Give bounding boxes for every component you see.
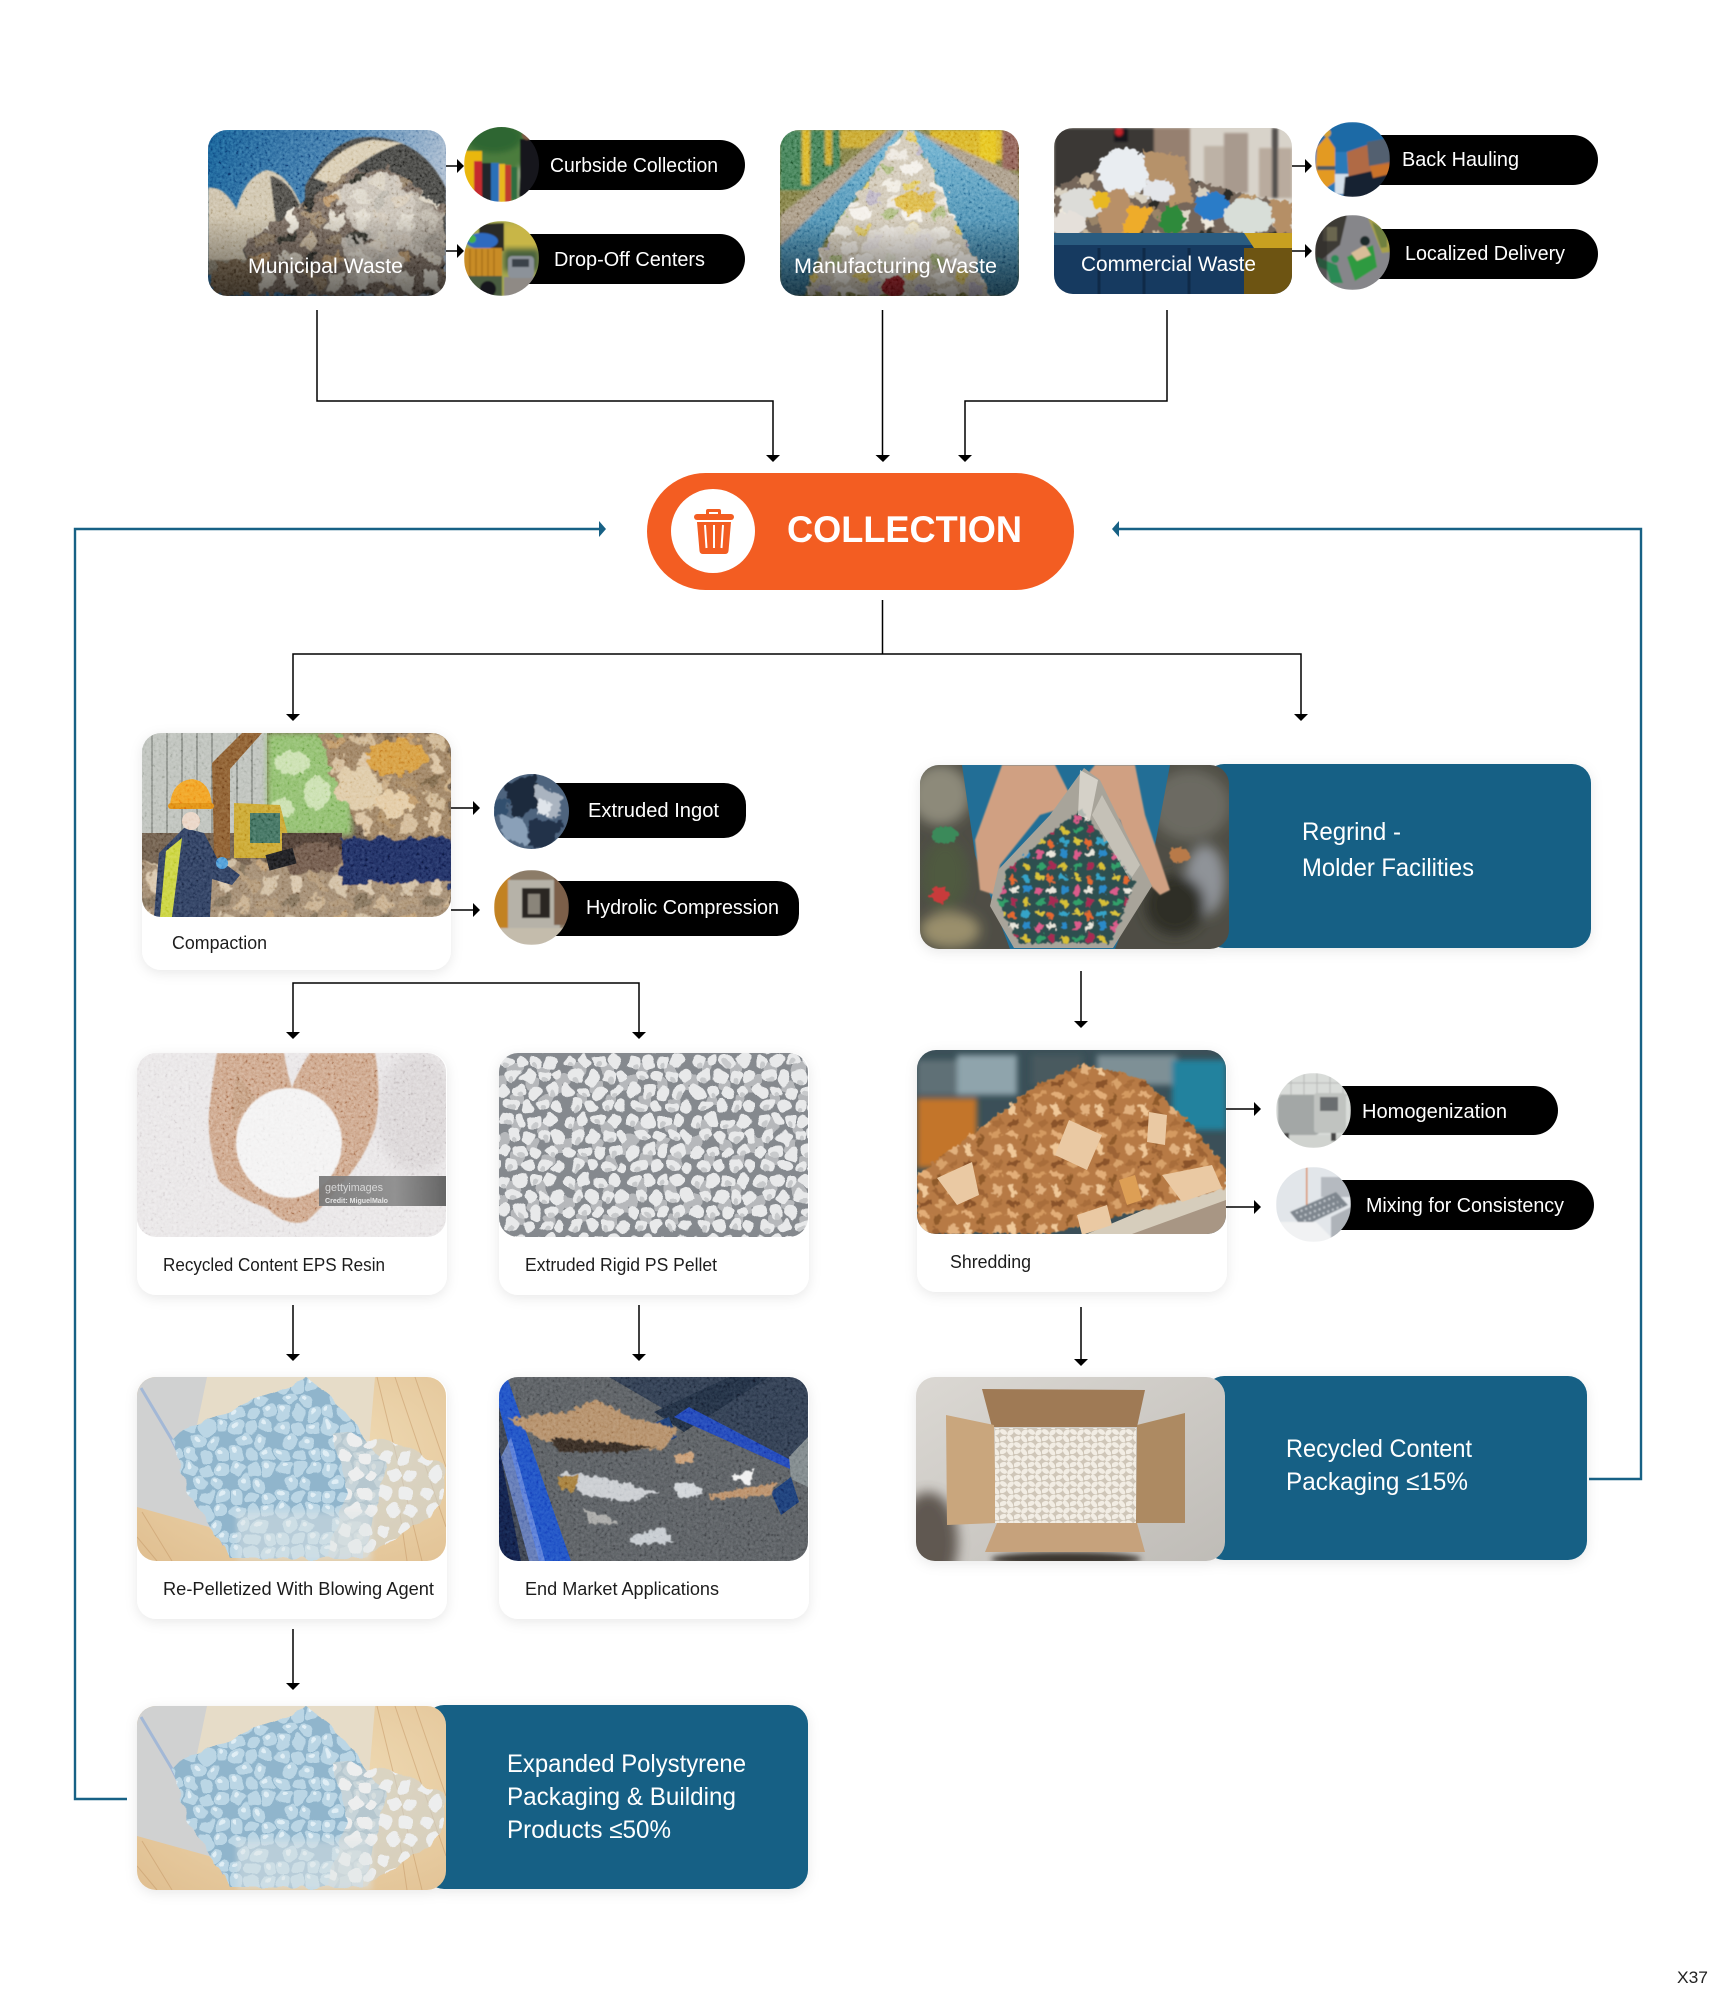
arrow: commercial to collection: [958, 310, 1167, 462]
text: expanded polystyrene: [507, 1750, 746, 1844]
arrow: compaction split: [286, 983, 646, 1039]
photo: worker at recycling plant: [142, 733, 451, 926]
arrow: municipal to curbside: [446, 159, 464, 173]
pill: drop-off centers: [500, 234, 745, 284]
arrow: loop back from expanded polystyrene: [75, 521, 606, 1799]
photo: waste pile under domes: [208, 130, 446, 296]
arrow: shredding to homogenization: [1226, 1102, 1261, 1116]
panel: commercial waste: [1051, 128, 1292, 294]
photo: blue pellets: [137, 1377, 446, 1561]
pill: curbside collection: Curbside Collection: [550, 155, 718, 177]
pill: hydrolic compression: Hydrolic Compression: [586, 897, 779, 919]
pill: mixing for consistency: Mixing for Consistency: [1366, 1195, 1564, 1217]
text: recycled content packaging: [1286, 1435, 1472, 1496]
panel: municipal waste: [208, 130, 446, 296]
panel: shredding: [917, 1050, 1227, 1292]
pill: extruded ingot: Extruded Ingot: [588, 800, 719, 822]
icon: mixing equipment photo: [1276, 1167, 1351, 1242]
panel: expanded polystyrene packaging: [137, 1705, 808, 1890]
footer code: X37: [1677, 1968, 1708, 1987]
panel: re-pelletized with blowing agent: [137, 1377, 447, 1619]
photo: open box of packing peanuts: [898, 1377, 1225, 1592]
panel: collection hub: [647, 473, 1074, 590]
pill: hydrolic compression: [530, 881, 799, 936]
label: extruded rigid PS pellet: Extruded Rigid PS Pellet: [525, 1255, 717, 1275]
text: regrind molder facilities: Regrind -: [1302, 818, 1401, 846]
pill: curbside collection: [500, 140, 745, 190]
text: recycled content packaging: Packaging ≤15%: [1286, 1468, 1468, 1496]
pill: homogenization: [1314, 1086, 1558, 1135]
arrow: shredding to recycled packaging: [1074, 1307, 1088, 1366]
arrow: manufacturing to collection: [876, 310, 890, 462]
icon: curbside bins photo: [464, 127, 539, 202]
pill: drop-off centers: Drop-Off Centers: [554, 249, 705, 271]
panel: end market applications: [499, 1377, 809, 1619]
label: re-pelletized with blowing agent: Re-Pelletized With Blowing Agent: [163, 1579, 434, 1599]
photo: sorting conveyor: [499, 1377, 808, 1561]
label: shredding: Shredding: [950, 1252, 1031, 1272]
label: municipal waste: Municipal Waste: [248, 255, 403, 278]
text: recycled content packaging: Recycled Content: [1286, 1435, 1472, 1463]
icon: localized delivery photo: [1315, 215, 1390, 290]
label: compaction: Compaction: [172, 933, 267, 953]
arrow: shredding to mixing: [1226, 1200, 1261, 1214]
photo: blue pellets: [137, 1706, 446, 1890]
label: recycled content EPS resin: Recycled Content EPS Resin: [163, 1255, 385, 1275]
label: commercial waste: Commercial Waste: [1081, 253, 1256, 276]
arrow: re-pelletized to expanded polystyrene: [286, 1629, 300, 1690]
pill: homogenization: Homogenization: [1362, 1101, 1507, 1123]
panel: regrind molder facilities: [910, 764, 1591, 949]
photo: conveyor of textile waste: [780, 130, 1019, 297]
photo: overflowing dumpster: [1051, 128, 1292, 294]
icon: hydraulic press photo: [494, 870, 569, 945]
pill: back hauling: Back Hauling: [1402, 149, 1519, 171]
arrow: municipal to collection: [317, 310, 780, 462]
arrow: loop back from recycled packaging: [1112, 521, 1641, 1479]
panel: recycled content packaging: [898, 1376, 1587, 1592]
arrow: collection split: [286, 600, 1308, 721]
arrow: compaction to extruded ingot: [451, 801, 480, 815]
label: manufacturing waste: Manufacturing Waste: [794, 255, 997, 278]
icon: extruded ingot photo: [494, 774, 569, 849]
pill: back hauling: [1352, 135, 1598, 185]
arrow: regrind to shredding: [1074, 971, 1088, 1028]
pill: mixing for consistency: [1314, 1180, 1594, 1230]
panel: extruded rigid PS pellet: [487, 1041, 820, 1295]
arrow: EPS resin to re-pelletized: [286, 1305, 300, 1361]
panel: compaction: [142, 733, 451, 970]
pill: extruded ingot: [530, 783, 746, 838]
arrow: commercial to localized delivery: [1292, 244, 1312, 258]
panel: manufacturing waste: [780, 130, 1019, 297]
arrow: PS pellet to end market: [632, 1305, 646, 1361]
photo: hands holding EPS beads: Credit: MiguelMalo: [325, 1198, 388, 1205]
panel: recycled content EPS resin: [137, 1053, 457, 1295]
photo: hands holding bag of plastics: [910, 765, 1230, 949]
icon: homogenizer photo: [1276, 1073, 1351, 1148]
text: expanded polystyrene: Products ≤50%: [507, 1816, 671, 1844]
text: expanded polystyrene: Packaging & Building: [507, 1783, 736, 1811]
icon: trash can: [671, 489, 755, 573]
photo: hands holding EPS beads: gettyimages: [325, 1182, 383, 1194]
arrow: commercial to back hauling: [1292, 159, 1312, 173]
icon: back hauling truck photo: [1315, 122, 1390, 197]
text: regrind molder facilities: Molder Facilities: [1302, 854, 1474, 882]
photo: hands holding EPS beads: [137, 1053, 457, 1237]
heading: collection: COLLECTION: [787, 509, 1022, 550]
photo: white pellets: [499, 1053, 808, 1237]
photo: pile of shredded material: [917, 1050, 1226, 1235]
pill: localized delivery: Localized Delivery: [1405, 243, 1565, 265]
icon: drop-off bin photo: [464, 221, 539, 297]
arrow: municipal to drop-off: [446, 244, 464, 258]
arrow: compaction to hydrolic compression: [451, 903, 480, 917]
pill: localized delivery: [1352, 229, 1598, 279]
text: regrind molder facilities: [1302, 818, 1474, 882]
label: end market applications: End Market Applications: [525, 1579, 719, 1599]
text: expanded polystyrene: Expanded Polystyrene: [507, 1750, 746, 1778]
